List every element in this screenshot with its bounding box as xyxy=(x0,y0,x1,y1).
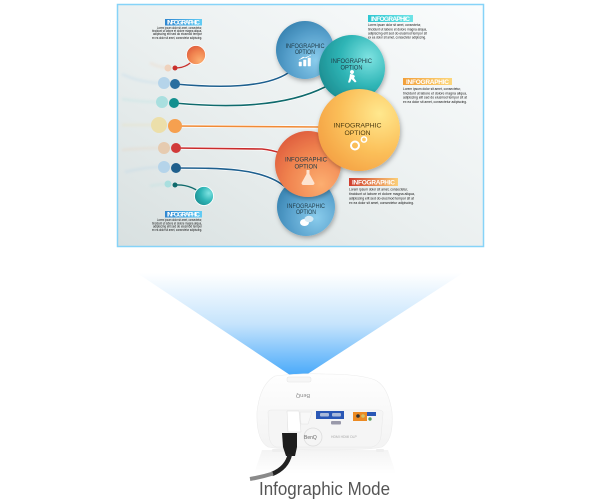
floor reflection xyxy=(254,450,396,474)
projector body xyxy=(257,374,392,450)
panel: projected screen xyxy=(118,4,484,246)
white cable block xyxy=(287,411,301,432)
faded light trails xyxy=(122,63,168,186)
label: bottom left: INFOGRAPHIC xyxy=(167,212,200,218)
label: top right xyxy=(368,15,427,40)
small teal circle xyxy=(194,186,214,206)
label: top right: tincidunt ut labore et dolore magna aliqua, xyxy=(368,27,427,31)
label: bottom left: ex ea dolor sit amet, consectetur adipiscing. xyxy=(152,228,202,232)
label: middle right xyxy=(403,78,467,104)
rear labels: HDMI HDMI DLP xyxy=(331,435,358,439)
icon: gears xyxy=(351,137,367,150)
circle: option blue top: INFOGRAPHIC xyxy=(286,43,325,50)
small orange circle xyxy=(186,46,206,64)
circle: option blue top: OPTION xyxy=(295,49,315,56)
label: middle right: adipiscing elit sed do eiusmod tempor sit at xyxy=(403,96,467,100)
circle: option red: OPTION xyxy=(294,164,318,170)
label: bottom left: Lorem ipsum dolor sit amet, consectetur, xyxy=(157,218,202,222)
label: top right: Lorem ipsum dolor sit amet, consectetur, xyxy=(368,23,421,27)
label: top left: INFOGRAPHIC xyxy=(167,20,200,26)
icon: speech bubbles xyxy=(300,216,314,226)
circle: option teal: INFOGRAPHIC xyxy=(331,58,372,65)
brand tag and loop xyxy=(304,428,322,446)
label: top left xyxy=(152,19,203,40)
blue ports xyxy=(316,411,344,419)
label: top right: adipiscing elit sed do eiusmod tempor sit xyxy=(368,31,427,35)
label: bottom left: tincidunt ut labore et dolore magna aliqua, xyxy=(152,221,202,225)
label: lower right: INFOGRAPHIC xyxy=(352,180,395,186)
top brand mark: BenQ xyxy=(295,392,310,398)
circle: option teal xyxy=(319,35,385,101)
label: lower right xyxy=(349,178,415,205)
label: middle right: ex ea dolor sit amet, consectetur adipiscing. xyxy=(403,100,467,104)
projection light beam xyxy=(137,273,463,375)
icon: bar chart xyxy=(299,55,311,66)
lens vent xyxy=(287,377,311,382)
label: top left: Lorem ipsum dolor sit amet, consectetur, xyxy=(157,26,202,30)
label: middle right: INFOGRAPHIC xyxy=(406,79,449,86)
icon: flask xyxy=(302,170,314,185)
label: middle right: tincidunt ut labore et dolore magna aliqua, xyxy=(403,91,467,95)
blue and green audio ports xyxy=(367,412,376,416)
power plug xyxy=(282,433,297,456)
circle: option blue bottom xyxy=(277,178,335,236)
label: bottom left: adipiscing elit sed do eiusmod tempor xyxy=(153,225,203,229)
caption: Infographic Mode xyxy=(259,479,390,499)
label: lower right: adipiscing elit sed do eiusmod tempor sit at xyxy=(349,196,414,200)
circle: option yellow: OPTION xyxy=(344,130,371,137)
projector xyxy=(250,374,396,479)
label: lower right: tincidunt ut labore et dolore magna aliqua, xyxy=(349,192,415,196)
projector: BenQ xyxy=(304,435,317,441)
label: top left: adipiscing elit sed do eiusmod tempor xyxy=(153,32,203,36)
feet xyxy=(272,449,384,452)
circle: option blue top xyxy=(276,21,334,79)
circle: option red xyxy=(275,131,341,197)
icon: runner xyxy=(348,70,356,82)
connector lines xyxy=(174,55,325,196)
power cable xyxy=(272,454,290,474)
orange ports xyxy=(353,412,367,421)
rear panel xyxy=(268,410,383,447)
left dots: faded and solid pairs xyxy=(151,64,182,188)
circle: option teal: OPTION xyxy=(340,64,363,72)
circle: option red: INFOGRAPHIC xyxy=(285,156,327,164)
circle: option blue bottom: OPTION xyxy=(296,209,316,216)
label: top right: INFOGRAPHIC xyxy=(371,16,410,23)
circle: option yellow xyxy=(318,89,400,171)
label: top left: tincidunt ut labore et dolore magna aliqua, xyxy=(152,29,202,33)
circle: option blue bottom: INFOGRAPHIC xyxy=(287,203,325,210)
label: lower right: Lorem ipsum dolor sit amet, consectetur, xyxy=(349,188,408,192)
label: bottom left xyxy=(152,211,203,232)
label: lower right: ex ea dolor sit amet, consectetur adipiscing. xyxy=(349,201,414,205)
label: middle right: Lorem ipsum dolor sit amet, consectetur, xyxy=(403,87,461,91)
label: top left: ex ea dolor sit amet, consectetur adipiscing. xyxy=(152,36,202,40)
circle: option yellow: INFOGRAPHIC xyxy=(334,122,382,130)
label: top right: ex ea dolor sit amet, consectetur adipiscing. xyxy=(368,36,426,40)
